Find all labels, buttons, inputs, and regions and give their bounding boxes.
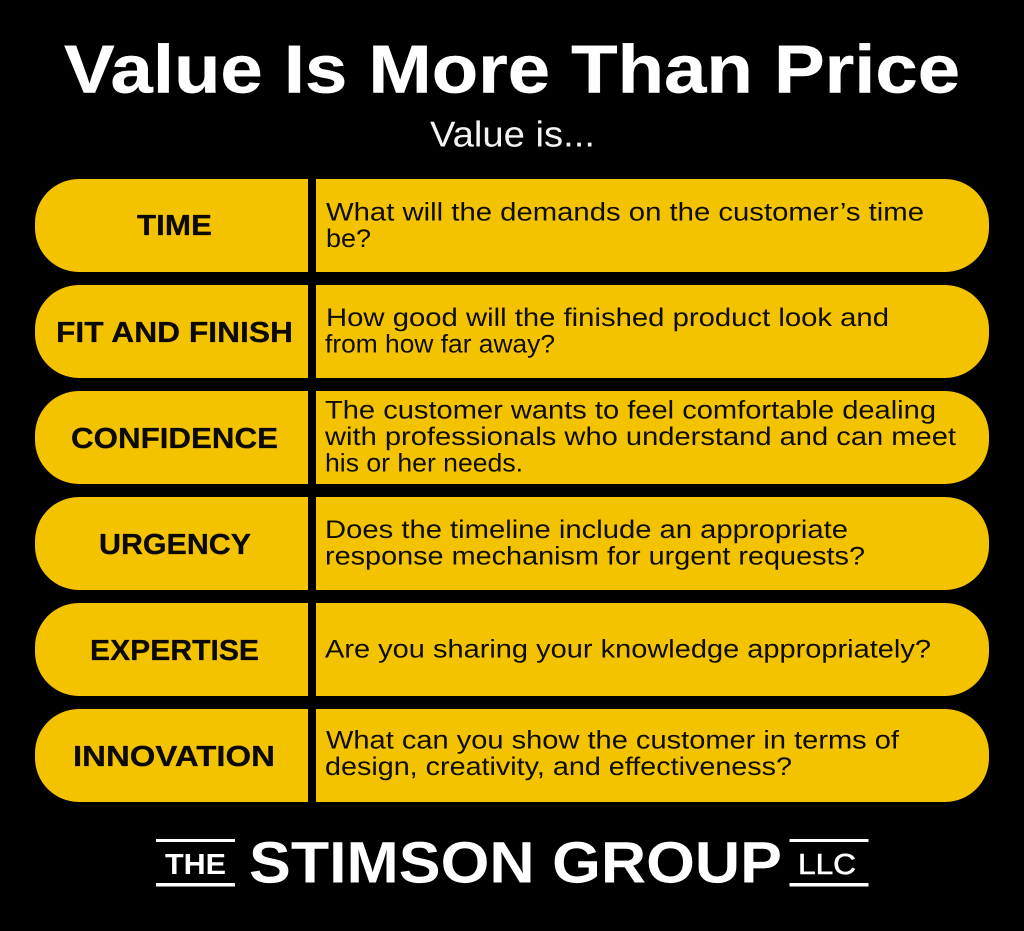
label panel: confidence (35, 391, 308, 484)
label panel: fit and finish: FIT AND FINISH (56, 317, 293, 349)
label panel: innovation (35, 709, 308, 802)
logo: The Stimson Group LLC: STIMSON GROUP (249, 831, 782, 896)
description panel: confidence: with professionals who understand and can meet (324, 423, 956, 451)
description panel: fit and finish: How good will the finished product look and (326, 304, 889, 332)
row: innovation (35, 709, 989, 802)
description panel: urgency: Does the timeline include an appropriate (325, 516, 848, 544)
description panel: time (316, 179, 989, 272)
description panel: time: What will the demands on the customer’s time (326, 198, 924, 226)
row: confidence (35, 391, 989, 484)
description panel: urgency (316, 497, 989, 590)
description panel: urgency: response mechanism for urgent requests? (325, 542, 865, 570)
row: expertise (35, 603, 989, 696)
label panel: innovation: INNOVATION (73, 741, 275, 773)
logo: The Stimson Group LLC: THE (165, 849, 226, 881)
subtitle: Value is... (430, 114, 595, 155)
description panel: time: be? (326, 225, 371, 253)
description panel: fit and finish: from how far away? (325, 330, 555, 358)
label panel: confidence: CONFIDENCE (71, 423, 278, 455)
title: Value Is More Than Price (64, 32, 960, 108)
label panel: time: TIME (137, 210, 212, 242)
label panel: expertise: EXPERTISE (90, 635, 259, 667)
description panel: innovation: design, creativity, and effectiveness? (325, 753, 792, 781)
description panel: innovation: What can you show the customer in terms of (326, 726, 900, 754)
label panel: expertise (35, 603, 308, 696)
label panel: urgency (35, 497, 308, 590)
label panel: fit and finish (35, 285, 308, 378)
logo: The Stimson Group LLC (156, 831, 868, 896)
description panel: fit and finish (316, 285, 989, 378)
description panel: confidence: The customer wants to feel comfortable dealing (325, 396, 936, 424)
logo: The Stimson Group LLC: LLC (798, 849, 856, 881)
label panel: urgency: URGENCY (99, 529, 251, 561)
description panel: confidence (316, 391, 989, 484)
label panel: time (35, 179, 308, 272)
row: fit and finish (35, 285, 989, 378)
description panel: expertise: Are you sharing your knowledge appropriately? (325, 636, 931, 664)
description panel: expertise (316, 603, 989, 696)
description panel: innovation (316, 709, 989, 802)
row: urgency (35, 497, 989, 590)
description panel: confidence: his or her needs. (325, 450, 523, 478)
row: time (35, 179, 989, 272)
